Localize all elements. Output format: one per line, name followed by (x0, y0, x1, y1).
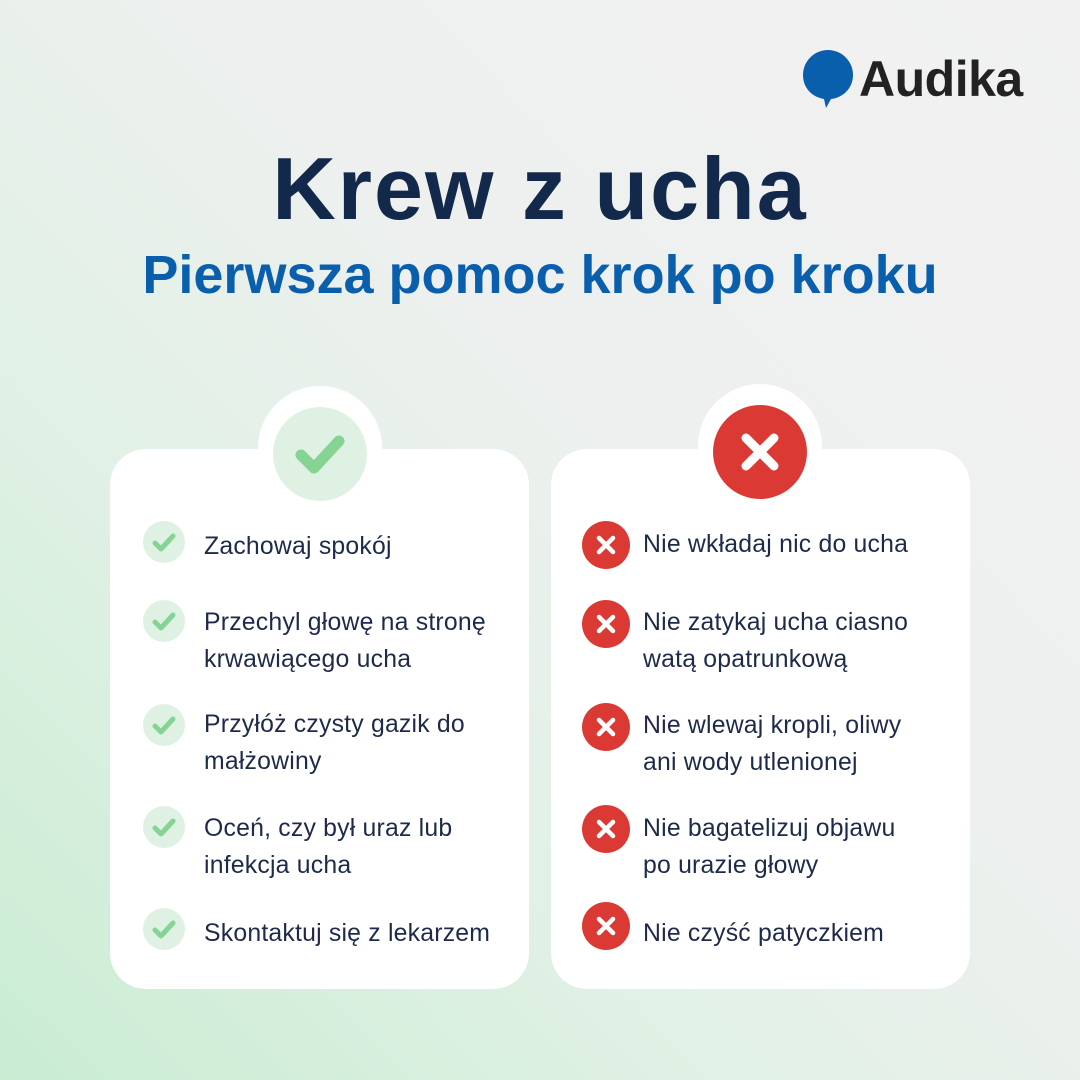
item 3: małżowiny (204, 748, 322, 775)
item 1 (582, 521, 908, 569)
item 5: Skontaktuj się z lekarzem (204, 920, 490, 947)
item 3: Nie wlewaj kropli, oliwy (643, 712, 901, 739)
item 5 (582, 902, 884, 950)
item 4: infekcja ucha (204, 852, 351, 879)
icon: big check (273, 407, 367, 501)
item 2: krwawiącego ucha (204, 646, 411, 673)
item 1: Zachowaj spokój (204, 533, 392, 560)
item 2: Przechyl głowę na stronę (204, 609, 486, 636)
item 2 (582, 600, 908, 673)
item 2: Nie zatykaj ucha ciasno (643, 609, 908, 636)
item 3: ani wody utlenionej (643, 749, 858, 776)
panel: dont (551, 449, 970, 989)
icon: big cross (713, 405, 807, 499)
item 4 (143, 806, 452, 879)
title: Krew z ucha (272, 139, 808, 238)
subtitle: Pierwsza pomoc krok po kroku (142, 245, 938, 305)
panel: dont: po urazie głowy (643, 852, 818, 879)
icon: speech bubble (803, 50, 853, 108)
logo (803, 50, 1024, 108)
panel: do (110, 449, 529, 989)
logo text: Audika (859, 51, 1023, 107)
item 4: Nie bagatelizuj objawu (643, 815, 896, 842)
item 4: Oceń, czy był uraz lub (204, 815, 452, 842)
item 5 (143, 908, 490, 950)
item 4 (582, 805, 896, 879)
item 1: Nie wkładaj nic do ucha (643, 531, 908, 558)
item 3 (143, 704, 465, 775)
item 3: Przyłóż czysty gazik do (204, 711, 465, 738)
item 3 (582, 703, 902, 776)
item 5: Nie czyść patyczkiem (643, 920, 884, 947)
bump: right (698, 384, 822, 508)
item 2 (143, 600, 486, 673)
item 1 (143, 521, 392, 563)
item 2: watą opatrunkową (643, 646, 847, 673)
bump: left (258, 386, 382, 510)
